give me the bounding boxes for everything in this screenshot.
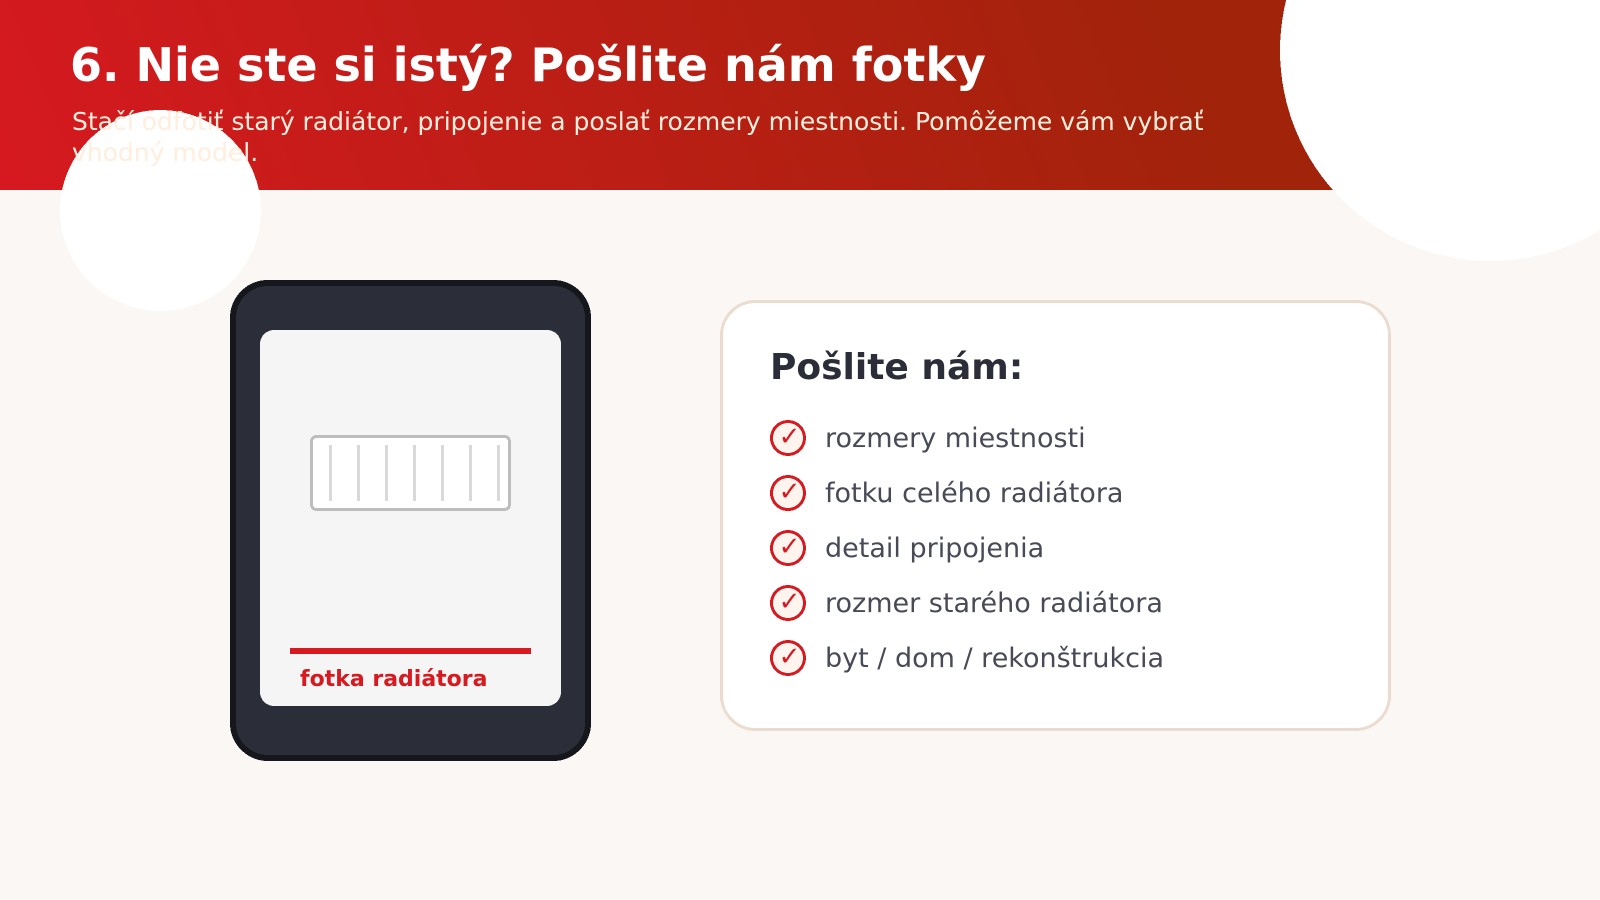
checklist item 1: rozmery miestnosti: [825, 423, 1086, 454]
subtitle: [72, 107, 1204, 167]
checklist item 4: ✓: [779, 587, 800, 617]
card heading: Pošlite nám:: [770, 347, 1023, 388]
red line: [290, 648, 531, 654]
decorative circle left: [60, 110, 261, 311]
phone body: [233, 283, 588, 758]
subtitle: Stačí odfotiť starý radiátor, pripojenie a poslať rozmery miestnosti. Pomôžeme vám vybrať: [72, 107, 1204, 136]
checklist item 3: detail pripojenia: [825, 533, 1044, 564]
phone illustration: [233, 283, 588, 758]
header band: [0, 0, 1600, 190]
photo caption: fotka radiátora: [300, 667, 488, 692]
subtitle: vhodný model.: [72, 138, 258, 167]
phone screen: [260, 330, 561, 706]
checklist item 5: byt / dom / rekonštrukcia: [825, 643, 1164, 674]
checklist item 4: rozmer starého radiátora: [825, 588, 1163, 619]
checklist item 3: ✓: [779, 532, 800, 562]
panel: checklist card: [722, 302, 1390, 730]
checklist item 2: ✓: [779, 477, 800, 507]
checklist item 2: fotku celého radiátora: [825, 478, 1123, 509]
checklist item 1: ✓: [779, 422, 800, 452]
checklist item 5: ✓: [779, 642, 800, 672]
icon: radiator: [312, 436, 510, 510]
title: 6. Nie ste si istý? Pošlite nám fotky: [70, 38, 986, 92]
decorative circle top right: [1280, 0, 1600, 261]
